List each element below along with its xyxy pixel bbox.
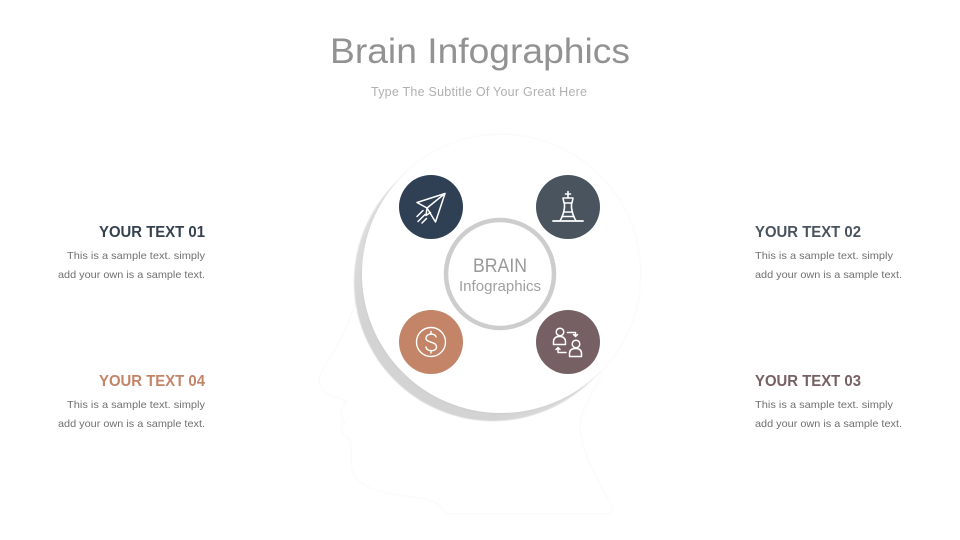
centre ring xyxy=(446,220,554,328)
body 02: This is a sample text. simply xyxy=(755,250,894,262)
body 01: This is a sample text. simply xyxy=(67,250,206,262)
title: Brain Infographics xyxy=(330,32,630,71)
brain crescent shadow xyxy=(354,143,632,421)
text block 02 xyxy=(755,224,902,281)
node 04: dollar xyxy=(399,310,463,374)
centre label: Infographics: Infographics xyxy=(459,278,541,295)
heading 02: YOUR TEXT 02 xyxy=(755,224,861,241)
text block 03: add your own is a sample text. xyxy=(755,418,902,430)
body 04: This is a sample text. simply xyxy=(67,399,206,411)
text block 02: add your own is a sample text. xyxy=(755,269,902,281)
heading 03: YOUR TEXT 03 xyxy=(755,373,861,390)
brain white circle xyxy=(362,135,640,413)
icon: chess king xyxy=(553,192,583,221)
text block 04: add your own is a sample text. xyxy=(58,418,205,430)
text block 01 xyxy=(58,224,206,281)
icon: swapping people xyxy=(554,328,582,356)
node 02: chess piece xyxy=(536,175,600,239)
node 01: paper plane xyxy=(399,175,463,239)
head silhouette xyxy=(320,300,612,513)
node 03: people exchange xyxy=(536,310,600,374)
text block 01: add your own is a sample text. xyxy=(58,269,205,281)
body 03: This is a sample text. simply xyxy=(755,399,894,411)
text block 04 xyxy=(58,373,206,430)
heading 01: YOUR TEXT 01 xyxy=(99,224,205,241)
text block 03 xyxy=(755,373,902,430)
subtitle: Type The Subtitle Of Your Great Here xyxy=(371,85,587,99)
centre label: BRAIN: BRAIN xyxy=(473,255,527,277)
icon: paper plane xyxy=(417,194,445,223)
heading 04: YOUR TEXT 04 xyxy=(99,373,205,390)
icon: dollar coin xyxy=(416,328,446,356)
